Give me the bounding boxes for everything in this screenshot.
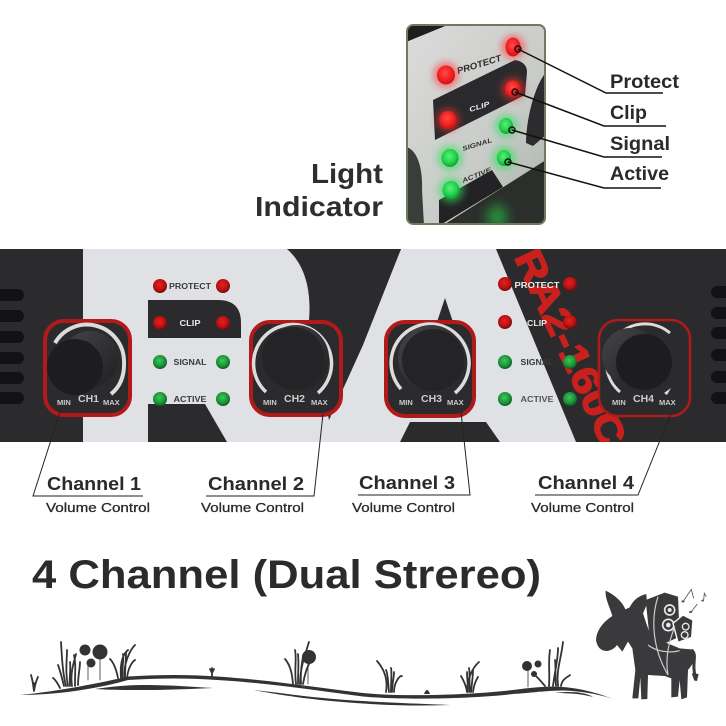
photo: light indicator closeup: ACTIVE	[460, 166, 493, 185]
heading: light indicator: Light	[311, 158, 383, 189]
callout: channel 2 volume control: Channel 2	[208, 474, 304, 494]
white R and A shapes	[83, 249, 576, 442]
callout: protect	[515, 46, 680, 93]
model logo: RA2-160C	[506, 243, 634, 453]
panel: amplifier front	[0, 243, 726, 453]
knob: channel 3: MIN	[399, 398, 413, 407]
photo: light indicator closeup: CLIP	[469, 101, 491, 114]
callout: protect: Protect	[610, 72, 680, 93]
callout: channel 1 volume control: Volume Control	[46, 500, 150, 515]
heading: light indicator: Indicator	[255, 191, 383, 222]
knob: channel 1	[45, 321, 130, 415]
callout: active	[505, 159, 669, 188]
callout: channel 3 volume control	[352, 412, 470, 515]
knob: channel 1: MIN	[57, 398, 71, 407]
callout: clip: Clip	[610, 103, 647, 124]
callout: channel 1 volume control	[33, 412, 150, 515]
indicator group right: ACTIVE	[520, 395, 554, 404]
knob: channel 3: CH3	[421, 393, 442, 405]
tail	[691, 650, 695, 675]
straps	[648, 597, 680, 675]
glowing LEDs	[433, 35, 525, 203]
indicator group left: PROTECT	[169, 282, 211, 291]
callout: channel 2 volume control	[201, 414, 323, 515]
illustration: grass landscape	[20, 642, 613, 706]
photo: light indicator closeup: PROTECT	[456, 52, 504, 76]
indicator group right: PROTECT	[514, 281, 560, 290]
small speaker	[673, 615, 693, 642]
heading: light indicator	[255, 158, 383, 222]
knob: channel 2: MAX	[311, 398, 328, 407]
callout: channel 4 volume control: Channel 4	[538, 473, 634, 493]
callout: channel 3 volume control: Channel 3	[359, 473, 455, 493]
knob: channel 2: MIN	[263, 398, 277, 407]
callout: channel 4 volume control	[531, 413, 671, 515]
knob: channel 1: CH1	[78, 393, 99, 405]
knob: channel 4: MAX	[659, 398, 676, 407]
callout: active: Active	[610, 164, 669, 185]
knob: channel 2: CH2	[284, 393, 305, 405]
photo: light indicator closeup: SIGNAL	[462, 137, 493, 153]
indicator group right	[498, 277, 577, 406]
callout: signal	[509, 127, 670, 157]
icon: donkey carrying speakers	[596, 589, 706, 699]
vents	[0, 286, 726, 404]
knob: channel 4: CH4	[633, 393, 654, 405]
callout: channel 1 volume control: Channel 1	[47, 474, 141, 494]
knob: channel 2	[251, 322, 341, 415]
title: 4 Channel (Dual Strereo)	[32, 553, 541, 597]
indicator group left: ACTIVE	[174, 395, 207, 404]
knob: channel 3: MAX	[447, 398, 464, 407]
knob: channel 1: MAX	[103, 398, 120, 407]
knob: channel 3	[386, 322, 474, 416]
knob: channel 4: MIN	[612, 398, 626, 407]
callout: signal: Signal	[610, 134, 670, 155]
callout: channel 2 volume control: Volume Control	[201, 500, 304, 515]
grass and flowers	[31, 642, 570, 692]
callout: clip	[512, 89, 666, 126]
indicator group left: SIGNAL	[174, 358, 207, 367]
knob: channel 4	[599, 320, 690, 416]
callout: channel 4 volume control: Volume Control	[531, 500, 634, 515]
indicator group right: SIGNAL	[520, 358, 554, 367]
callout: channel 3 volume control: Volume Control	[352, 500, 455, 515]
indicator group left	[153, 279, 230, 406]
donkey silhouette	[596, 591, 696, 699]
photo: light indicator closeup	[406, 24, 546, 229]
indicator group right: CLIP	[527, 319, 548, 328]
indicator group left: CLIP	[180, 319, 201, 328]
music notes	[684, 589, 706, 612]
large speaker	[646, 593, 680, 645]
